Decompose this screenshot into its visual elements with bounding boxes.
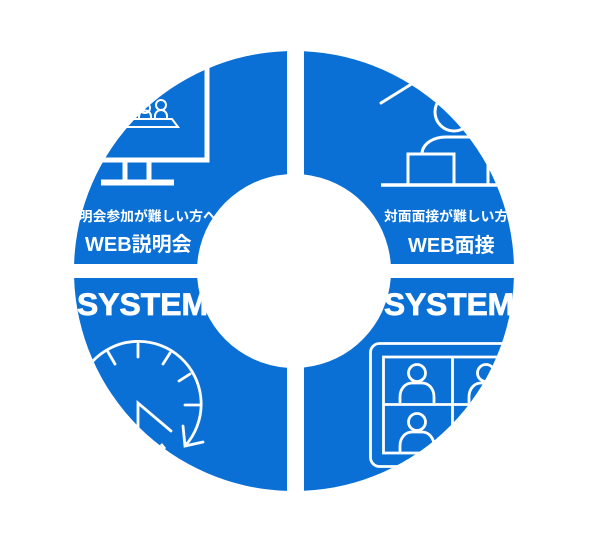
icon: speed gauge: [92, 341, 203, 449]
icon: monitor with presenters: [100, 60, 207, 182]
panel: SYSTEM (bottom left quadrant): [74, 278, 287, 491]
heading: SYSTEM: SYSTEM: [77, 286, 208, 322]
panel: SYSTEM (bottom right quadrant): [304, 278, 540, 491]
text: subtitle: 対面面接が難しい方へ: [384, 208, 522, 224]
text: subtitle: 説明会参加が難しい方へ: [65, 208, 217, 224]
icon: video call grid: [370, 344, 540, 466]
icon: interview at laptop: [381, 80, 520, 185]
heading: WEB説明会: WEB説明会: [85, 233, 192, 256]
heading: WEB面接: WEB面接: [408, 234, 495, 257]
panel: WEB説明会 (top left quadrant): [65, 51, 287, 264]
panel: WEB面接 (top right quadrant): [304, 51, 522, 264]
heading: SYSTEM: SYSTEM: [384, 286, 514, 322]
